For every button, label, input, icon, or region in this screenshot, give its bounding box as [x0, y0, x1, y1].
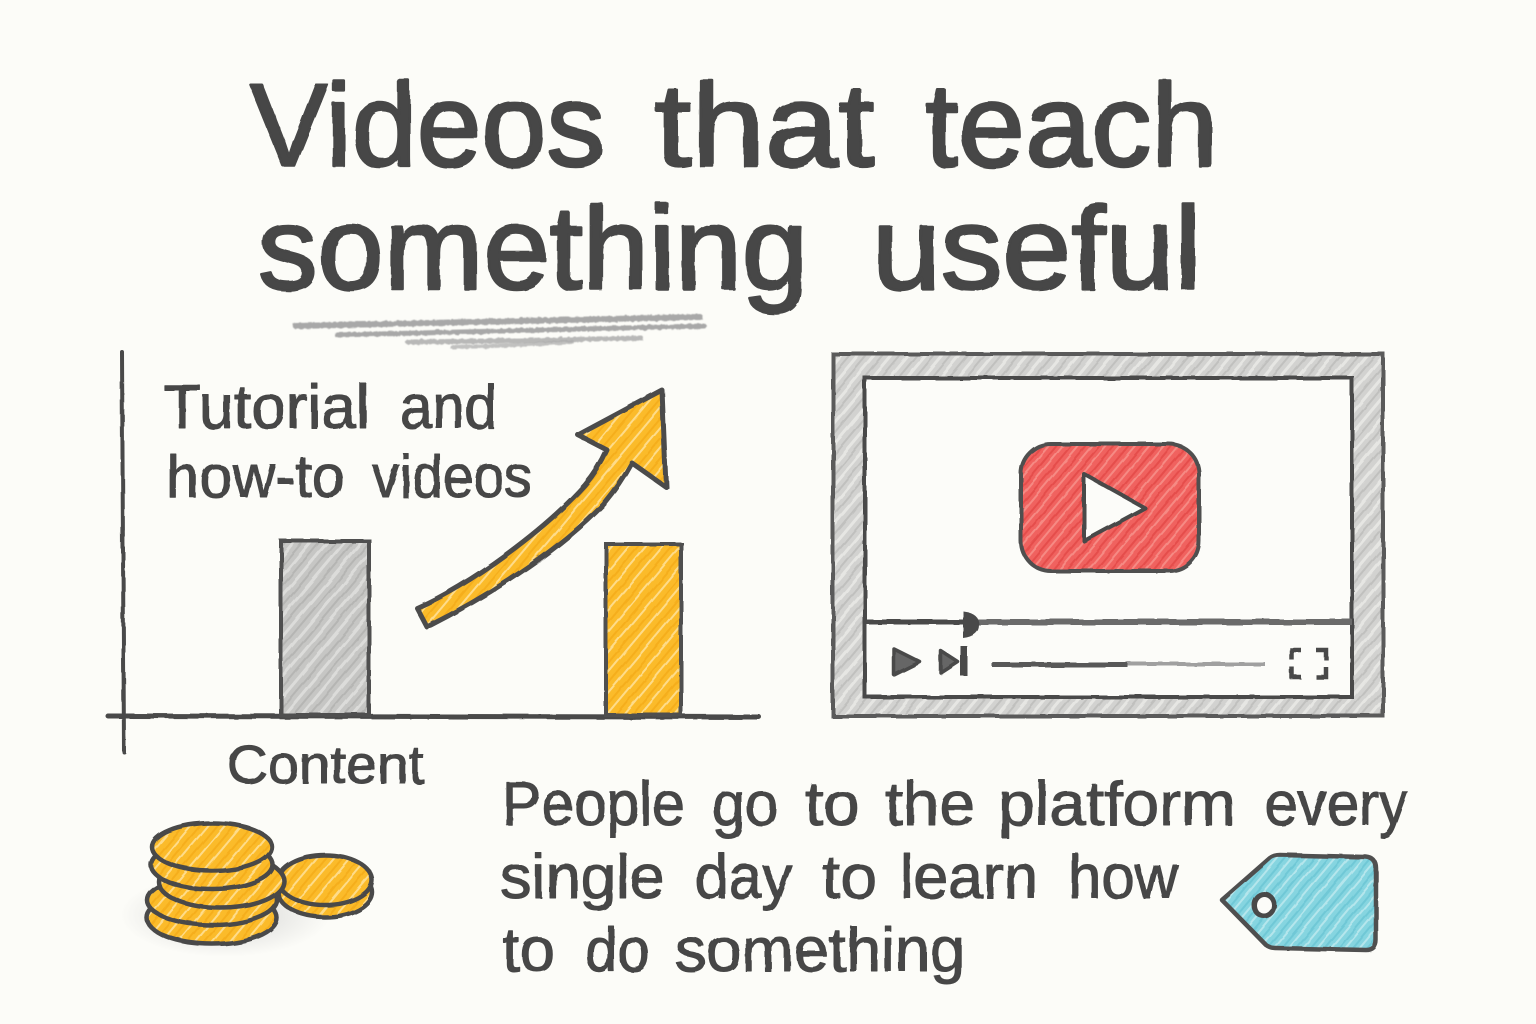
scrubber	[963, 611, 979, 638]
description text: to	[822, 843, 877, 912]
description text: every	[1265, 770, 1408, 839]
description text: People	[502, 770, 685, 839]
chart axes	[108, 352, 759, 752]
description text: to	[805, 770, 860, 839]
description text: day	[695, 843, 792, 912]
coins	[120, 823, 372, 957]
growth arrow	[417, 390, 666, 627]
description text: do	[585, 916, 650, 985]
screen	[865, 378, 1352, 697]
description text: go	[712, 770, 778, 839]
title underline	[296, 317, 704, 347]
player frame	[833, 354, 1383, 716]
description text: to	[502, 916, 555, 985]
tag hole	[1254, 894, 1274, 916]
bar chart	[108, 352, 759, 795]
timeline	[992, 664, 1265, 665]
description text: learn	[900, 843, 1038, 912]
side coin	[278, 855, 372, 917]
title: that	[655, 60, 875, 192]
play triangle	[1084, 474, 1145, 541]
title: useful	[872, 183, 1202, 315]
chart annotation	[163, 373, 532, 510]
chart annotation: Tutorial	[163, 373, 370, 442]
skip control	[941, 646, 964, 676]
title: teach	[925, 60, 1218, 192]
icon: price tag	[1222, 855, 1376, 950]
title: Videos	[250, 60, 605, 192]
video player	[833, 354, 1383, 716]
title: something	[258, 183, 808, 315]
progress line	[866, 620, 1352, 624]
title	[250, 60, 1218, 315]
description text	[500, 770, 1408, 985]
description text: how	[1068, 843, 1178, 912]
chart annotation: videos	[372, 443, 532, 510]
yellow bar	[606, 544, 681, 715]
description text: platform	[998, 770, 1236, 839]
coin stack	[147, 823, 284, 944]
chart annotation: and	[400, 373, 497, 442]
play button	[1021, 444, 1199, 571]
grey bar	[281, 541, 369, 715]
fullscreen icon	[1292, 650, 1326, 677]
chart annotation: how-to	[166, 443, 345, 510]
axis label: content: Content	[227, 735, 424, 795]
coin shadow	[120, 873, 330, 957]
play control	[894, 649, 920, 675]
description text: single	[500, 843, 665, 912]
description text: something	[675, 916, 965, 985]
description text: the	[885, 770, 975, 839]
